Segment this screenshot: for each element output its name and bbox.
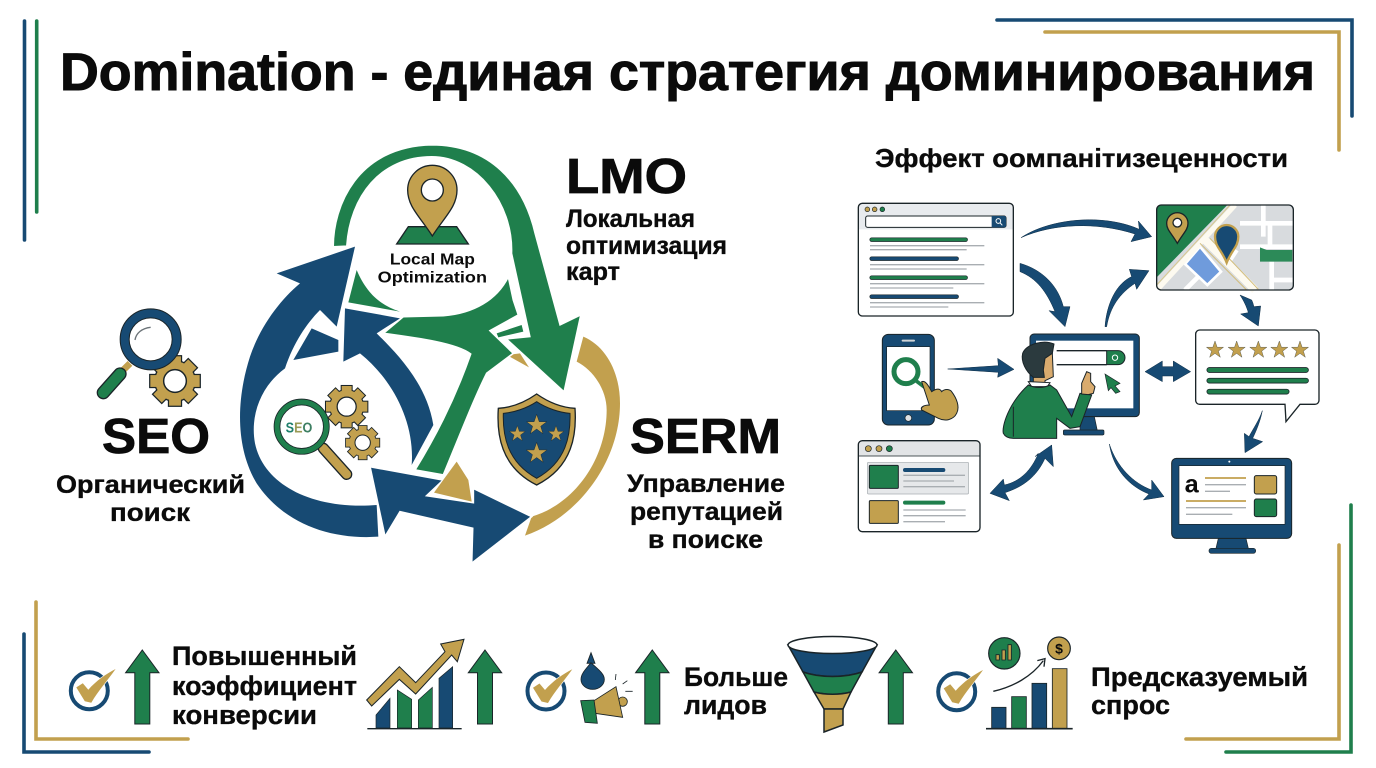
- benefit: more leads: [528, 636, 912, 732]
- icon: check: [528, 669, 572, 710]
- icon: bar chart with coins: $: [1055, 640, 1063, 656]
- text: SEO description: Органический: [56, 471, 245, 499]
- icon: map pin: [397, 165, 468, 244]
- text: LMO description: карт: [566, 258, 620, 286]
- icon: person: [1003, 342, 1095, 438]
- benefit: predictable demand: [938, 637, 1308, 729]
- panel: reviews bubble: [1196, 330, 1319, 422]
- icon: top SEO magnifier: [103, 313, 200, 406]
- arrow: navy outer SEO arrow: [240, 247, 378, 537]
- panel: monitor with content: [1172, 458, 1292, 553]
- heading: effect: Эффект оомпанітизеценности: [875, 143, 1288, 173]
- icon: SEO magnifier with gears: SEO: [286, 421, 312, 437]
- text: SERM description: [627, 470, 785, 554]
- title: Domination - единая стратегия доминирования: [60, 43, 1315, 102]
- cycle diagram: three interlocking arrows: [240, 145, 620, 563]
- text: LMO description: [566, 205, 727, 286]
- diagram: touchpoint network: [858, 203, 1319, 553]
- icon: up arrow: [636, 650, 669, 724]
- panel: map: [1157, 205, 1293, 290]
- icon: growth chart: [367, 639, 464, 729]
- icon: funnel: [788, 636, 877, 732]
- icon: check: [938, 670, 983, 710]
- icon: bar chart with coins: [986, 637, 1073, 729]
- text: demand label: спрос: [1091, 690, 1170, 720]
- heading: SEO: SEO: [102, 410, 210, 464]
- icon: monitor: [1030, 334, 1139, 435]
- icon: SEO magnifier with gears: [277, 386, 379, 474]
- icon: phone with search and hand: [882, 334, 958, 425]
- text: SEO description: поиск: [110, 499, 191, 527]
- panel: monitor with content: a: [1185, 470, 1200, 498]
- text: conversion label: конверсии: [172, 700, 317, 730]
- icon: drop and megaphone: [581, 653, 633, 723]
- label: Local Map Optimization: Local Map: [390, 251, 475, 268]
- icon: reputation shield: [498, 394, 575, 485]
- icon: up arrow: [468, 650, 502, 724]
- heading: LMO: LMO: [566, 150, 687, 204]
- text: demand label: [1091, 662, 1308, 720]
- arrows: network connectors: [948, 220, 1263, 501]
- icon: check: [71, 669, 116, 709]
- text: SERM description: репутацией: [630, 498, 783, 526]
- arrow: green outer LMO arrow: [333, 145, 581, 392]
- arrow: green crescent: [348, 270, 400, 312]
- arrow: navy bottom double arrow: [370, 467, 532, 563]
- arrow: gold sliver: [507, 353, 529, 367]
- benefit: conversion rate: [71, 639, 502, 730]
- text: LMO description: оптимизация: [566, 232, 727, 260]
- text: SEO description: [56, 471, 245, 527]
- text: conversion label: коэффициент: [172, 671, 357, 701]
- panel: person at monitor: [1003, 334, 1139, 438]
- text: SERM description: в поиске: [648, 526, 763, 554]
- text: leads label: [684, 662, 788, 720]
- text: LMO description: Локальная: [566, 205, 695, 233]
- arrow: green inner band: [383, 277, 518, 475]
- arrow: gold triangle: [434, 462, 472, 502]
- panel: search results browser: [858, 203, 1013, 316]
- panel: second browser: [858, 441, 980, 532]
- text: conversion label: [172, 641, 357, 730]
- text: leads label: лидов: [684, 690, 767, 720]
- icon: up arrow: [126, 650, 159, 724]
- label: Local Map Optimization: [378, 251, 487, 287]
- arrow: navy inner arrow: [343, 308, 433, 465]
- text: conversion label: Повышенный: [172, 641, 357, 671]
- text: demand label: Предсказуемый: [1091, 662, 1308, 692]
- text: leads label: Больше: [684, 662, 788, 692]
- label: Local Map Optimization: Optimization: [378, 270, 487, 287]
- icon: up arrow: [879, 650, 912, 724]
- text: SERM description: Управление: [627, 470, 785, 498]
- arrow: gold SERM arc: [525, 337, 620, 536]
- heading: SERM: SERM: [630, 410, 781, 464]
- arrow: navy sliver: [293, 328, 338, 360]
- arrow: green sliver: [497, 325, 523, 337]
